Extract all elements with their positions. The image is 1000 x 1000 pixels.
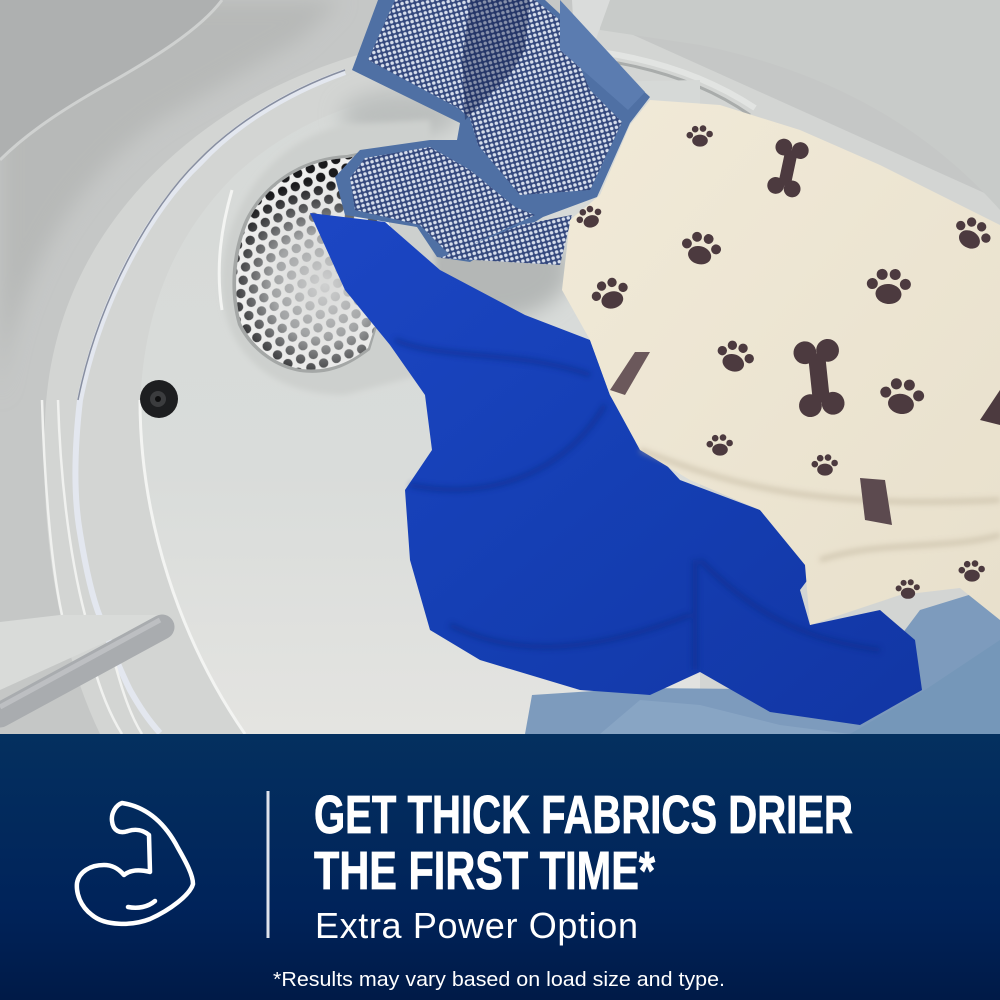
cobalt blue shirt: [310, 213, 922, 725]
headline: THE FIRST TIME*: [314, 841, 655, 901]
divider: [266, 791, 270, 938]
denim jeans: [525, 590, 1000, 734]
black drum button: [140, 380, 178, 418]
subheading: Extra Power Option: [315, 905, 638, 946]
blue grey towel: [335, 0, 650, 265]
footnote: *Results may vary based on load size and type.: [273, 969, 725, 991]
dryer vent: [219, 120, 440, 395]
icon: flexed bicep: [77, 803, 193, 924]
dryer drum background: [0, 0, 1000, 740]
door seal hose: [42, 70, 345, 734]
cream pet towel: [562, 100, 1000, 625]
vent mesh: [236, 156, 391, 370]
navy caption band: [0, 734, 1000, 1000]
drum baffle: [0, 615, 165, 715]
shirt folds: [395, 340, 880, 670]
headline: [314, 785, 853, 901]
drum floor: [140, 80, 700, 734]
